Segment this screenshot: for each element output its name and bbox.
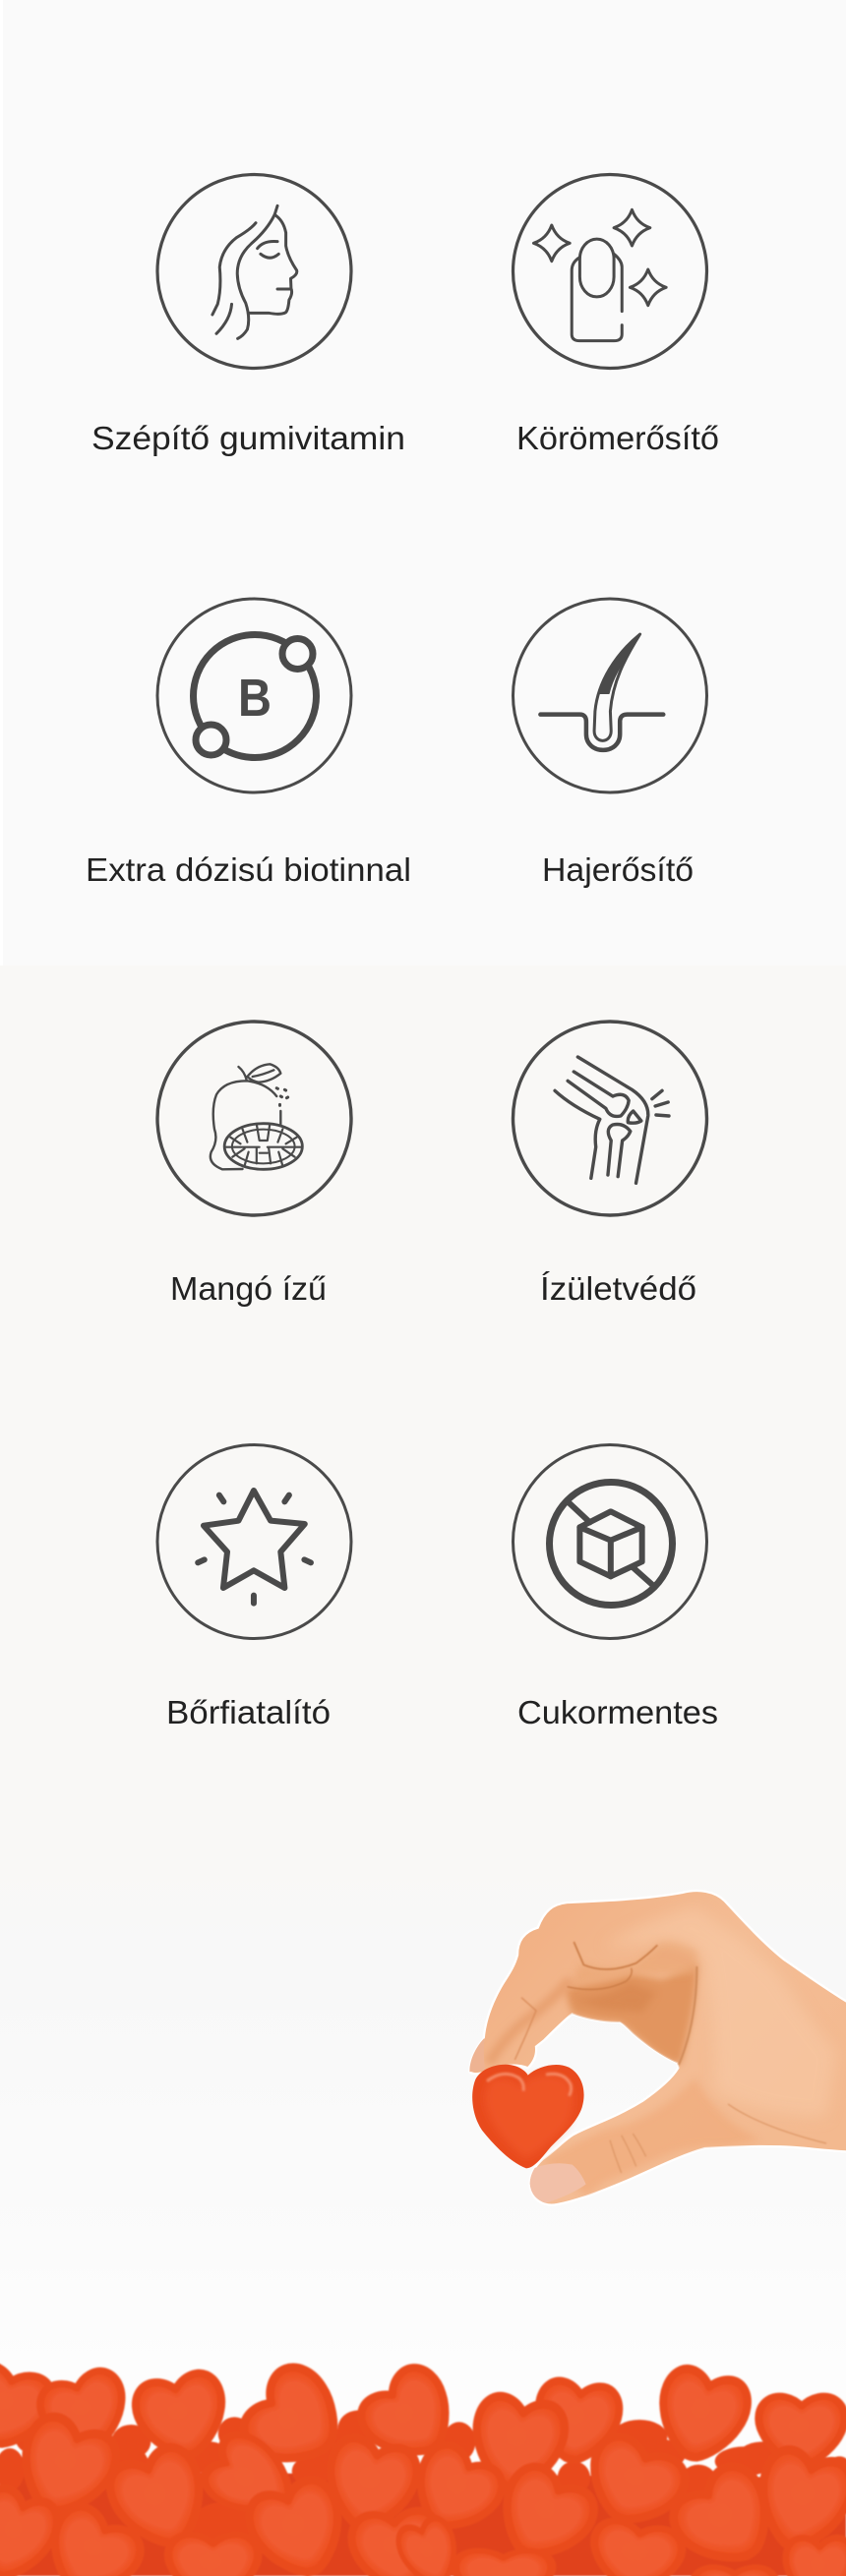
icon: woman profile (157, 175, 351, 368)
label: Szépítő gumivitamin (91, 420, 405, 456)
label: Körömerősítő (516, 420, 719, 456)
icon: biotin B molecule (157, 599, 351, 792)
icon: hair follicle (514, 599, 706, 792)
hand (469, 1891, 846, 2205)
feature: Körömerősítő (514, 175, 719, 456)
feature: Szépítő gumivitamin (91, 175, 405, 456)
background: upper panel (0, 0, 846, 966)
feature: Extra dózisú biotinnal (86, 599, 411, 888)
photo: pile of heart gummies (0, 2358, 846, 2576)
icon: star (157, 1445, 351, 1638)
photo: hand holding heart gummy (469, 1891, 846, 2205)
darker base behind hearts (0, 2471, 846, 2576)
feature: Mangó ízű (157, 1022, 351, 1307)
feature: Hajerősítő (514, 599, 706, 888)
feature: Bőrfiatalító (157, 1445, 351, 1730)
feature: Cukormentes (514, 1445, 718, 1730)
heart gummy (472, 2065, 584, 2168)
label: Extra dózisú biotinnal (86, 851, 411, 888)
feature: Ízületvédő (514, 1022, 706, 1307)
icon: nail with sparkles (514, 175, 706, 368)
icon: mango (157, 1022, 351, 1215)
label: Bőrfiatalító (166, 1694, 331, 1730)
label: Ízületvédő (540, 1270, 696, 1307)
background: lower panel (0, 966, 846, 2576)
icon: no sugar cube (514, 1445, 706, 1638)
label: Hajerősítő (542, 851, 694, 888)
label: Cukormentes (517, 1694, 718, 1730)
icon: biotin B molecule: B (238, 669, 272, 728)
icon: knee joint (514, 1022, 706, 1215)
label: Mangó ízű (170, 1270, 327, 1307)
